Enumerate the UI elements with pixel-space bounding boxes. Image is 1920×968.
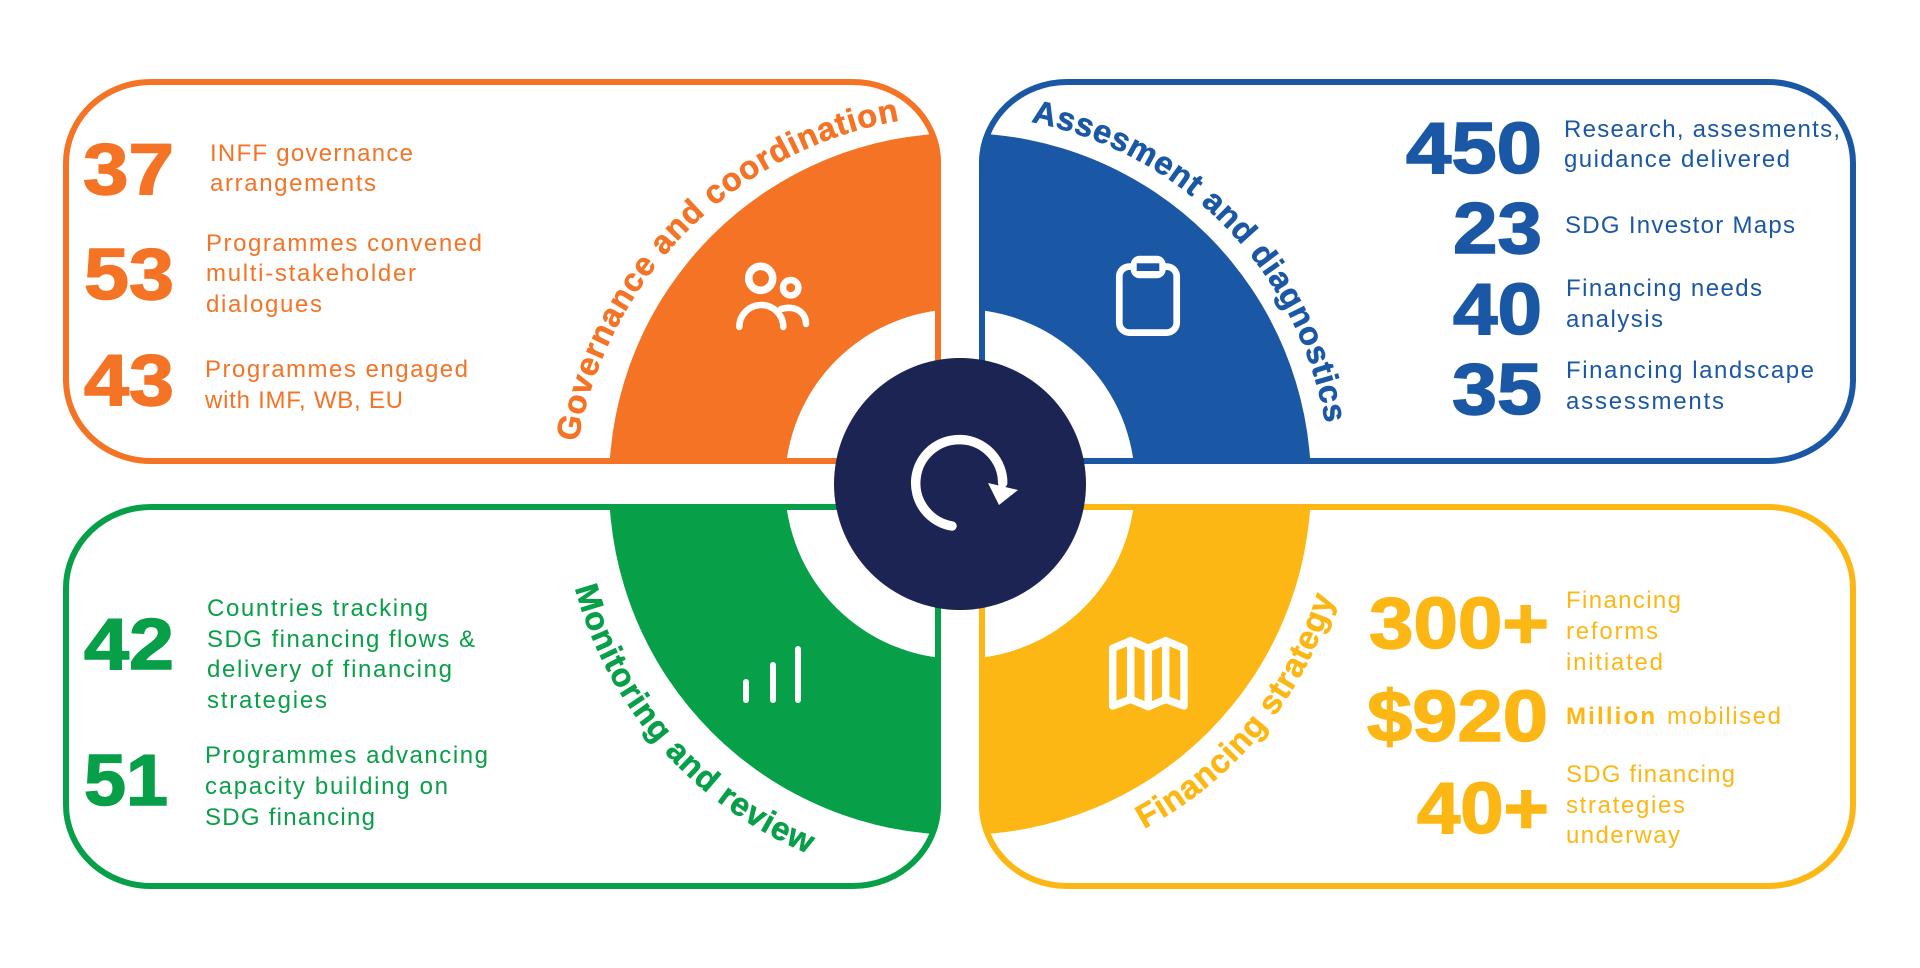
stat: 23 SDG Investor Maps <box>1453 189 1795 269</box>
stat: 450 Research, assesments, guidance delivered <box>1406 109 1840 189</box>
panel: monitoring and review <box>63 504 941 889</box>
curved heading: Monitoring and review: Monitoring and review <box>575 583 816 852</box>
stat: 42 Countries tracking SDG financing flows and delivery of financing strategies: Countries tracking <box>207 595 428 622</box>
stat: 51 Programmes advancing capacity building on SDG financing: Programmes advancing <box>205 742 488 769</box>
stat: 51 Programmes advancing capacity building on SDG financing: SDG financing <box>205 804 375 831</box>
stat: 37 INFF governance arrangements: 37 <box>83 130 174 210</box>
stat: 23 SDG Investor Maps: 23 <box>1453 189 1542 269</box>
stat: 53 Programmes convened multi-stakeholder dialogues: 53 <box>84 235 174 315</box>
stat: 43 Programmes engaged with IMF, WB, EU: 43 <box>84 341 174 421</box>
stat: $920 Million mobilised <box>1367 677 1781 757</box>
stat: 37 INFF governance arrangements: INFF governance <box>210 140 413 167</box>
stat: 23 SDG Investor Maps: SDG Investor Maps <box>1565 212 1795 239</box>
quarter ring: blue <box>979 134 1310 458</box>
stat: 51 Programmes advancing capacity building on SDG financing: capacity building on <box>205 773 448 800</box>
panel: governance and coordination <box>63 79 941 464</box>
stat: 300+ Financing reforms initiated: 300+ <box>1369 584 1549 664</box>
stat: 40+ SDG financing strategies underway: SDG financing <box>1566 761 1735 788</box>
stat: 35 Financing landscape assessments: Financing landscape <box>1566 357 1814 384</box>
stat: $920 Million mobilised: Million <box>1566 703 1655 730</box>
stat: 42 Countries tracking SDG financing flows and delivery of financing strategies: SDG financing flows & <box>207 626 475 653</box>
stat: 43 Programmes engaged with IMF, WB, EU <box>84 341 468 421</box>
stat: 35 Financing landscape assessments: assessments <box>1566 388 1724 415</box>
stat: 40 Financing needs analysis: analysis <box>1566 306 1663 333</box>
stat: 450 Research, assesments, guidance delivered: Research, assesments, <box>1564 116 1840 143</box>
curved heading: Financing strategy: Financing strategy <box>1134 592 1337 828</box>
stat: 300+ Financing reforms initiated: Financing <box>1566 587 1681 614</box>
stat: 37 INFF governance arrangements: arrangements <box>210 170 376 197</box>
panel outline: yellow <box>982 507 1853 886</box>
icon: people <box>739 266 806 327</box>
panel outline: blue <box>982 82 1853 461</box>
icon: folded map <box>1113 641 1184 707</box>
stat: 40 Financing needs analysis: Financing needs <box>1566 275 1762 302</box>
stat: 42 Countries tracking SDG financing flows and delivery of financing strategies: delivery of financing <box>207 656 452 683</box>
stat: 43 Programmes engaged with IMF, WB, EU: with IMF, WB, EU <box>204 387 403 414</box>
stat: $920 Million mobilised: $920 <box>1367 677 1548 757</box>
curved heading: Governance and coordination: Governance and coordination <box>558 104 898 440</box>
stat: 42 Countries tracking SDG financing flows and delivery of financing strategies: 42 <box>84 605 174 685</box>
icon: bar chart <box>746 649 798 700</box>
stat: 300+ Financing reforms initiated <box>1369 584 1681 676</box>
stat: 35 Financing landscape assessments <box>1452 350 1814 430</box>
panel outline: orange <box>66 82 938 461</box>
icon: clipboard <box>1119 256 1177 333</box>
panel outline: green <box>66 507 938 886</box>
stat: 53 Programmes convened multi-stakeholder dialogues: Programmes convened <box>206 230 482 257</box>
icon: cycle arrow <box>916 440 1018 526</box>
stat: 40+ SDG financing strategies underway: 40+ <box>1417 769 1549 849</box>
stat: 300+ Financing reforms initiated: reforms <box>1566 618 1658 645</box>
stat: 53 Programmes convened multi-stakeholder dialogues <box>84 230 482 318</box>
stat: 40 Financing needs analysis <box>1453 270 1762 350</box>
quarter ring: yellow <box>979 510 1310 834</box>
stat: 40+ SDG financing strategies underway: underway <box>1566 822 1680 849</box>
stat: 450 Research, assesments, guidance delivered: guidance delivered <box>1564 146 1790 173</box>
stat: 51 Programmes advancing capacity building on SDG financing: 51 <box>84 741 168 821</box>
stat: 53 Programmes convened multi-stakeholder dialogues: dialogues <box>206 291 322 318</box>
stat: 42 Countries tracking SDG financing flows and delivery of financing strategies <box>84 595 475 714</box>
stat: $920 Million mobilised: mobilised <box>1667 703 1781 730</box>
quarter ring: green <box>610 510 941 834</box>
stat: 450 Research, assesments, guidance delivered: 450 <box>1406 109 1542 189</box>
stat: 40+ SDG financing strategies underway <box>1417 761 1735 849</box>
stat: 43 Programmes engaged with IMF, WB, EU: Programmes engaged <box>205 356 468 383</box>
quarter ring: orange <box>610 134 941 458</box>
hub circle <box>834 358 1086 610</box>
centre hub circle with cycle arrow <box>834 358 1086 610</box>
stat: 37 INFF governance arrangements <box>83 130 413 210</box>
panel: assessment and diagnostics <box>979 79 1856 464</box>
stat: 40 Financing needs analysis: 40 <box>1453 270 1542 350</box>
stat: 42 Countries tracking SDG financing flows and delivery of financing strategies: strategies <box>207 687 327 714</box>
stat: 53 Programmes convened multi-stakeholder dialogues: multi-stakeholder <box>206 260 416 287</box>
curved heading: Assesment and diagnostics: Assesment and diagnostics <box>1031 102 1342 422</box>
stat: 51 Programmes advancing capacity building on SDG financing <box>84 741 488 831</box>
stat: 40+ SDG financing strategies underway: strategies <box>1566 792 1685 819</box>
stat: 35 Financing landscape assessments: 35 <box>1452 350 1542 430</box>
panel: financing strategy <box>979 504 1856 889</box>
stat: 300+ Financing reforms initiated: initiated <box>1566 649 1663 676</box>
